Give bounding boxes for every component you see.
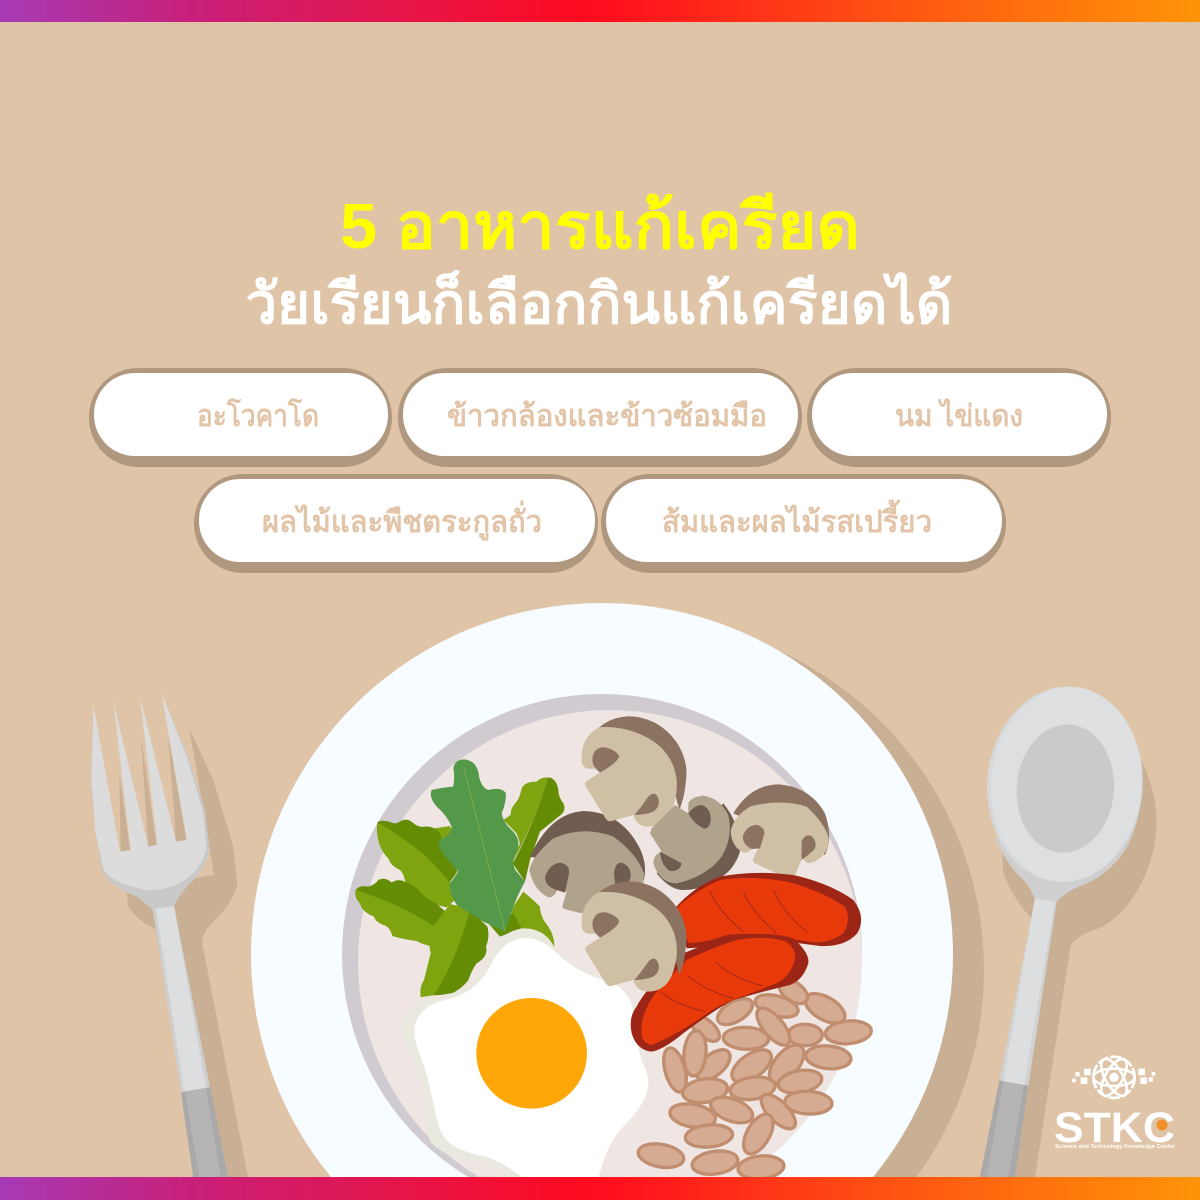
pill: rice: ข้าวกล้องและข้าวซ้อมมือ xyxy=(447,400,767,433)
spoon bowl back xyxy=(995,798,1142,902)
logo orange dot xyxy=(1156,1120,1168,1130)
mushrooms and sausages xyxy=(529,716,861,1052)
mushroom: front xyxy=(582,881,686,992)
fork head back xyxy=(91,693,209,909)
pill: fruits and legumes xyxy=(194,474,598,573)
logo icon xyxy=(1072,1055,1155,1100)
plate shadow xyxy=(282,619,984,1190)
leaves xyxy=(355,759,565,997)
leaf: bottom xyxy=(420,904,488,997)
leaf: lower left xyxy=(355,879,447,946)
logo: STKC xyxy=(1054,1055,1176,1152)
fork shadow xyxy=(119,728,248,1178)
leaf: lower right xyxy=(434,826,554,948)
bottom gradient bar xyxy=(0,1177,1200,1200)
mushroom: dark left xyxy=(529,811,645,913)
mushroom: centre xyxy=(650,796,741,890)
pill: milk and egg yolk: นม ไข่แดง xyxy=(895,398,1023,433)
title line 1: 5 อาหารแก้เครียด xyxy=(340,190,860,262)
fork xyxy=(91,693,248,1178)
spoon inner oval xyxy=(1011,720,1119,857)
spoon handle xyxy=(980,898,1057,1177)
pill: citrus xyxy=(601,474,1006,573)
title line 2: วัยเรียนก็เลือกกินแก้เครียดได้ xyxy=(246,269,952,335)
spoon xyxy=(979,680,1157,1177)
beans xyxy=(636,975,872,1181)
spoon shadow xyxy=(980,761,1157,1177)
logo tagline: Science and Technology Knowledge Center xyxy=(1055,1144,1176,1150)
egg yolk xyxy=(476,998,587,1109)
mushroom: right xyxy=(731,784,829,875)
plate xyxy=(251,603,953,1190)
pill: milk and egg yolk xyxy=(807,368,1111,467)
leaf: upper left xyxy=(377,820,457,907)
egg white xyxy=(414,938,648,1183)
logo wordmark: STKC xyxy=(1054,1104,1175,1152)
mushroom: top xyxy=(582,716,686,827)
pill: citrus: ส้มและผลไม้รสเปรี้ยว xyxy=(662,499,932,539)
pill: rice xyxy=(398,368,802,467)
top gradient bar xyxy=(0,0,1200,22)
title xyxy=(246,190,952,335)
fork handle xyxy=(153,906,228,1178)
leaf: upper right xyxy=(503,777,565,882)
spoon bowl xyxy=(979,680,1151,889)
fried egg xyxy=(402,928,648,1183)
sausage: lower xyxy=(631,934,808,1052)
leaf: centre xyxy=(431,759,525,932)
fork tines xyxy=(92,693,207,891)
pill: avocado xyxy=(89,368,392,467)
egg white shadow xyxy=(402,928,637,1183)
sausage: upper xyxy=(675,873,861,948)
pill: avocado: อะโวคาโด xyxy=(197,397,319,433)
pill: fruits and legumes: ผลไม้และพืชตระกูลถั่ว xyxy=(262,500,542,541)
